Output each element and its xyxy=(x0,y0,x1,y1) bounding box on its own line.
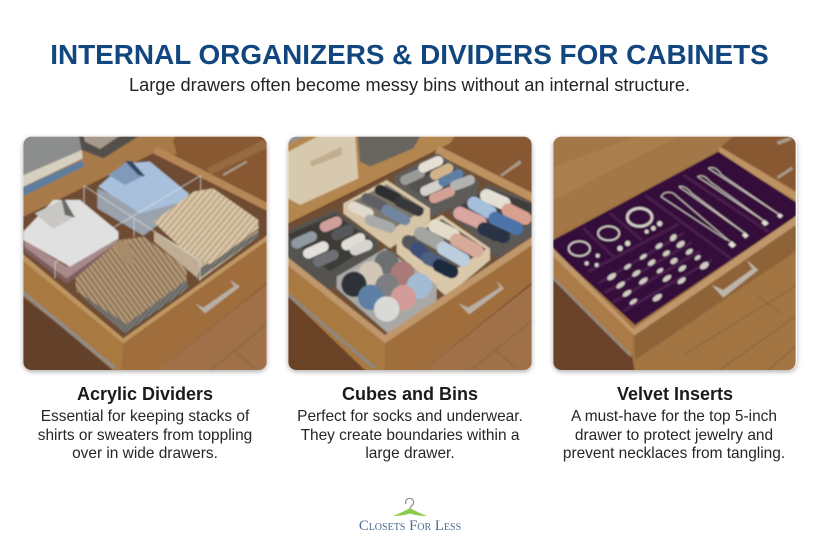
panel: acrylic dividers photo xyxy=(23,136,267,370)
description: A must-have for the top 5-inch xyxy=(571,408,777,425)
small earrings xyxy=(585,221,662,267)
gray bin back xyxy=(395,153,478,217)
logo: Closets For Less xyxy=(359,498,461,534)
illustration: drawer with fabric bins xyxy=(288,136,532,370)
panel: cubes and bins photo xyxy=(288,136,532,370)
illustration: drawer with shirts and sweaters xyxy=(23,136,267,370)
description: Essential for keeping stacks of xyxy=(41,408,249,425)
drawer box xyxy=(20,252,123,347)
description: over in wide drawers. xyxy=(72,445,218,462)
icon: hanger xyxy=(393,498,427,516)
beige bin centre xyxy=(397,215,490,297)
description: They create boundaries within a xyxy=(301,426,519,444)
description: drawer to protect jewelry and xyxy=(575,426,773,444)
heading: Acrylic Dividers xyxy=(77,384,213,404)
stacks xyxy=(97,188,188,236)
wordmark: Closets For Less xyxy=(359,518,461,534)
rings xyxy=(606,233,710,306)
acrylic dividers xyxy=(55,176,201,281)
drawer box xyxy=(550,213,800,336)
description xyxy=(38,408,252,462)
heading: Velvet Inserts xyxy=(617,384,733,404)
description: large drawer. xyxy=(365,445,455,462)
description xyxy=(297,408,523,462)
gray bin right xyxy=(450,185,535,258)
beige bin back xyxy=(343,180,430,248)
necklaces xyxy=(661,168,780,242)
drawer box xyxy=(285,235,535,343)
title: INTERNAL ORGANIZERS & DIVIDERS FOR CABINETS xyxy=(50,39,769,70)
description xyxy=(563,408,785,462)
bracelets xyxy=(569,208,652,256)
heading: Cubes and Bins xyxy=(342,384,478,404)
column: cubes and bins text xyxy=(297,384,523,462)
velvet dividers xyxy=(583,175,768,311)
subtitle: Large drawers often become messy bins without an internal structure. xyxy=(129,75,690,95)
description: prevent necklaces from tangling. xyxy=(563,445,785,462)
column: acrylic dividers text xyxy=(38,384,252,462)
panel: velvet inserts photo xyxy=(553,136,797,370)
illustration: drawer with velvet jewelry tray xyxy=(553,136,796,370)
description: shirts or sweaters from toppling xyxy=(38,426,252,444)
description: Perfect for socks and underwear. xyxy=(297,408,523,425)
light gray bin with rolls xyxy=(337,248,437,335)
gray bin left xyxy=(285,210,378,290)
column: velvet inserts text xyxy=(563,384,785,462)
